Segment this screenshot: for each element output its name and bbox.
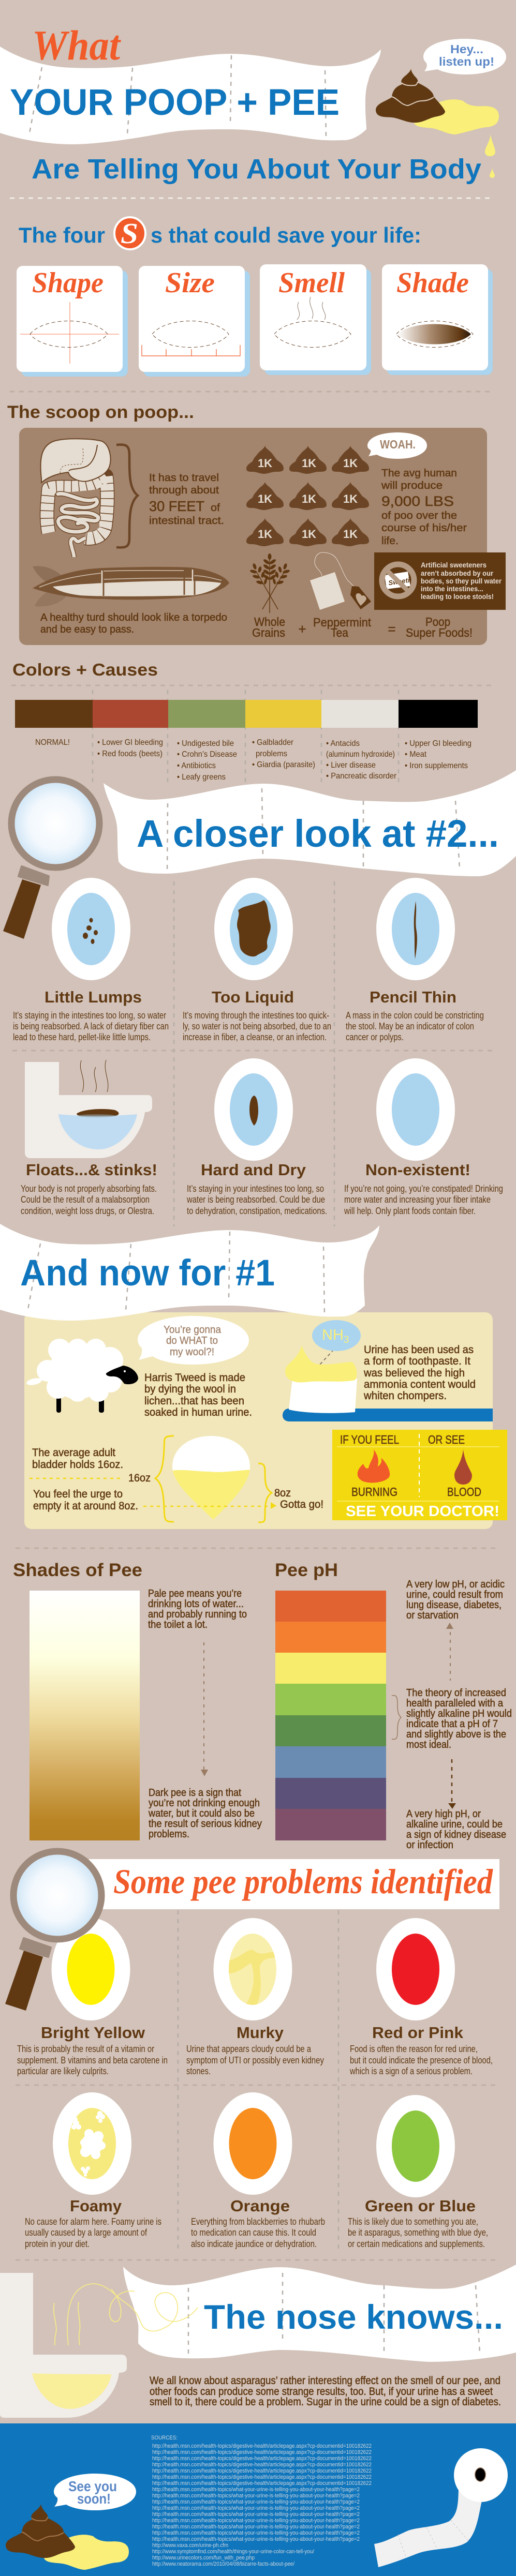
item: non-existent: Non-existent! — [365, 1161, 470, 1179]
item: bright yellow: This is probably the result of a vitamin or — [17, 2044, 154, 2054]
item: too liquid: Too Liquid — [212, 988, 294, 1006]
callout: see your doctor: BLOOD — [447, 1485, 481, 1499]
diagram: bladder: The average adult — [32, 1447, 115, 1459]
icon grid: 1K poops — [246, 446, 369, 546]
text: super foods equation: = — [388, 621, 396, 637]
icon grid: 1K poops: 1K — [302, 492, 316, 505]
callout: see your doctor: BURNING — [351, 1485, 397, 1499]
card: shade: Shade — [396, 267, 469, 299]
speech bubble: woah: WOAH. — [380, 438, 416, 451]
text: color causes: • Crohn’s Disease — [177, 750, 237, 759]
card: size: Size — [165, 267, 215, 299]
icon: blood drop — [454, 1449, 472, 1485]
banner: the nose knows: The nose knows... — [204, 2298, 503, 2336]
item: orange — [191, 2092, 325, 2249]
text: ideal ph: and slightly above is the — [406, 1729, 506, 1740]
text: color causes: • Antacids — [326, 739, 360, 748]
item: orange: Orange — [230, 2197, 290, 2215]
banner: a closer look at #2 — [104, 770, 516, 876]
icon: toilet with yellow water and smell lines — [0, 2273, 198, 2418]
text: toothpaste: whiten chompers. — [363, 1390, 447, 1402]
item: green or blue: or certain medications and supplements. — [348, 2239, 485, 2249]
item: red or pink — [349, 1918, 493, 2076]
text: color causes: • Iron supplements — [405, 761, 468, 770]
item: bright yellow: particular are likely culprits. — [17, 2066, 109, 2076]
icon grid: 1K poops: 1K — [258, 492, 272, 505]
diagram: bladder: empty it at around 8oz. — [33, 1500, 138, 1512]
text: healthy turd: A healthy turd should look like a torpedo — [40, 611, 227, 623]
item: pencil thin — [346, 878, 484, 1042]
text: toothpaste: ammonia content would — [364, 1379, 476, 1390]
text: 9000 lbs: of poo over the — [381, 510, 457, 521]
banner: and now for #1: And now for #1 — [20, 1253, 275, 1294]
item: bright yellow: supplement. B vitamins and beta carotene in — [17, 2055, 168, 2065]
icon: toilet paper roll — [374, 2448, 508, 2567]
item: little lumps: lead to these hard, pellet-like little lumps. — [13, 1032, 151, 1042]
icon grid: 1K poops: 1K — [343, 492, 358, 505]
item: little lumps — [13, 878, 169, 1042]
item: foamy — [25, 2092, 161, 2249]
item: murky: symptom of UTI or possibly even kidney — [186, 2055, 324, 2065]
banner: a closer look at #2: A closer look at #2... — [137, 812, 499, 855]
icon: torpedo — [33, 566, 229, 607]
speech bubble: wool: do WHAT to — [166, 1335, 218, 1346]
diagram: bladder: 16oz — [128, 1472, 151, 1484]
text: high ph: a sign of kidney disease — [406, 1829, 506, 1840]
item: non-existent — [344, 1058, 503, 1216]
text: sources: http://health.msn.com/health-topics/digestive-health/articlepage.aspx?cp-documentid=100182622 — [152, 2443, 372, 2449]
text: super foods equation: Whole — [254, 615, 285, 628]
text: toothpaste: was believed the high — [363, 1367, 465, 1379]
heading: the four S: The four — [19, 223, 105, 247]
speech bubble: see you soon: See you — [68, 2478, 117, 2494]
text: sources: http://health.msn.com/health-topics/what-your-urine-is-telling-you-about-your-health?page=2 — [152, 2487, 360, 2493]
text: dark pee: the result of serious kidney — [149, 1818, 262, 1830]
callout: artificial sweeteners: Artificial sweeteners — [421, 561, 486, 569]
icon: no sweetener sign — [382, 564, 414, 596]
diagram: bladder: Gotta go! — [280, 1499, 323, 1510]
item: floats and stinks: condition, weight loss drugs, or Olestra. — [21, 1206, 154, 1216]
text: high ph — [406, 1808, 506, 1851]
icon grid: 1K poops: 1K — [258, 528, 272, 541]
icon: sheep — [26, 1339, 138, 1413]
text: 9000 lbs — [381, 467, 467, 547]
text: 30 feet: through about — [149, 484, 219, 496]
diagram: bladder — [30, 1433, 323, 1523]
callout: artificial sweeteners: aren’t absorbed by our — [421, 569, 494, 577]
text: sources: http://www.urinecolors.com/fun_with_pee.php — [152, 2555, 255, 2561]
speech bubble: hey listen up — [423, 39, 506, 74]
item: green or blue: be it asparagus, something with blue dye, — [348, 2227, 488, 2238]
callout: artificial sweeteners: into the intestines... — [421, 585, 483, 593]
icon: magnifying glass — [3, 780, 99, 939]
item: orange: Everything from blackberries to rhubarb — [191, 2216, 325, 2227]
heading: the four S: S — [121, 218, 138, 250]
item: bright yellow: Bright Yellow — [41, 2024, 145, 2042]
subtitle: Are Telling You About Your Body — [32, 154, 481, 185]
icon: toothbrush: NH — [322, 1327, 344, 1343]
chart: color swatches — [15, 700, 478, 728]
callout: artificial sweeteners: bodies, so they pull water — [421, 577, 502, 585]
text: sources: http://health.msn.com/health-topics/what-your-urine-is-telling-you-about-your-health?page=2 — [152, 2524, 360, 2530]
text: pale pee: and probably running to — [148, 1609, 247, 1620]
icon: intestines — [40, 439, 110, 557]
text: color causes: (aluminum hydroxide) — [326, 750, 395, 759]
text: color causes: • Antibiotics — [177, 761, 216, 770]
speech bubble: hey listen up: Hey... — [450, 42, 483, 56]
text: sources: http://www.neatorama.com/2010/04/08/bizarre-facts-about-pee/ — [152, 2561, 295, 2567]
text: toothpaste: a form of toothpaste. It — [364, 1355, 470, 1367]
text: super foods equation: Poop — [425, 615, 450, 628]
text: pale pee: the toilet a lot. — [148, 1619, 208, 1630]
text: sources: http://health.msn.com/health-topics/what-your-urine-is-telling-you-about-your-health?page=2 — [152, 2493, 360, 2499]
icon: poop and pee puddle — [376, 69, 499, 134]
speech bubble: wool: You’re gonna — [164, 1324, 222, 1336]
text: ideal ph: health paralleled with a — [406, 1698, 504, 1709]
diagram: bladder: You feel the urge to — [33, 1488, 123, 1500]
item: little lumps: is being reabsorbed. A lack of dietary fiber can — [13, 1021, 169, 1031]
text: dark pee: water, but it could also be — [148, 1808, 255, 1819]
text: 30 feet: of — [211, 502, 220, 514]
brace: ideal ph — [392, 1696, 401, 1739]
text: dark pee: problems. — [149, 1829, 189, 1840]
text: color causes: • Meat — [405, 750, 427, 759]
text: pale pee: Pale pee means you’re — [148, 1588, 242, 1599]
card: smell: Smell — [278, 267, 345, 299]
text: color causes: • Red foods (beets) — [97, 750, 163, 758]
item: hard and dry: water is being reabsorbed. Could be due — [186, 1194, 325, 1205]
chart: pee shade gradient — [30, 1591, 140, 1840]
speech bubble: hey listen up: listen up! — [439, 55, 494, 68]
text: super foods equation: + — [298, 621, 306, 637]
text: 9000 lbs: 9,000 LBS — [381, 493, 454, 509]
text: harris tweed: lichen...that has been — [144, 1395, 244, 1407]
icon: magnifying glass — [5, 1851, 101, 2011]
text: 30 feet: 30 FEET — [149, 498, 204, 514]
item: orange: to medication can cause this. It could — [191, 2227, 316, 2238]
text: color causes: NORMAL! — [35, 738, 70, 747]
text: sources: http://health.msn.com/health-topics/what-your-urine-is-telling-you-about-your-health?page=2 — [152, 2499, 360, 2505]
icon: toothbrush — [283, 1320, 493, 1421]
text: low ph: or starvation — [406, 1610, 459, 1621]
card: shade — [382, 264, 493, 375]
text: sources: http://health.msn.com/health-topics/digestive-health/articlepage.aspx?cp-documentid=100182622 — [152, 2468, 372, 2474]
text: color causes: • Undigested bile — [177, 739, 234, 748]
text: color causes — [35, 738, 471, 782]
item: hard and dry: It’s staying in your intestines too long, so — [187, 1184, 324, 1194]
text: healthy turd: and be easy to pass. — [40, 623, 134, 635]
card: smell — [260, 264, 371, 375]
item: pencil thin: A mass in the colon could be constricting — [346, 1010, 484, 1021]
text: dark pee: you’re not drinking enough — [149, 1798, 260, 1809]
item: pencil thin: Pencil Thin — [370, 988, 456, 1006]
text: sources: http://health.msn.com/health-topics/what-your-urine-is-telling-you-about-your-health?page=2 — [152, 2530, 360, 2536]
text: super foods equation — [252, 615, 473, 639]
text: toothpaste: Urine has been used as — [364, 1344, 474, 1356]
banner: toilet paper title: YOUR POOP + PEE — [10, 82, 340, 123]
icon grid: 1K poops: 1K — [343, 457, 358, 470]
text: color causes: • Liver disease — [326, 761, 376, 770]
text: dark pee: Dark pee is a sign that — [149, 1787, 241, 1799]
text: ideal ph: indicate that a pH of 7 — [406, 1718, 498, 1730]
diagram: bladder: bladder holds 16oz. — [32, 1459, 123, 1471]
text: color causes: • Leafy greens — [177, 773, 226, 782]
item: hard and dry: to dehydration, constipation, medications. — [187, 1206, 327, 1216]
item: foamy: protein in your diet. — [25, 2239, 90, 2249]
item: murky: stones. — [186, 2066, 211, 2076]
text: high ph: A very high pH, or — [406, 1808, 481, 1820]
text: ideal ph: The theory of increased — [406, 1687, 506, 1699]
text: pale pee: drinking lots of water... — [148, 1598, 244, 1610]
text: pale pee — [148, 1588, 247, 1630]
text: harris tweed: Harris Tweed is made — [144, 1372, 245, 1384]
speech bubble: see you soon — [54, 2474, 136, 2510]
item: foamy: usually caused by a large amount of — [25, 2227, 148, 2238]
text: 9000 lbs: course of his/her — [381, 522, 467, 534]
speech bubble: woah — [367, 432, 427, 459]
text: 9000 lbs: will produce — [381, 480, 443, 491]
item: red or pink: which is a sign of a serious problem. — [349, 2066, 473, 2076]
item: green or blue: Green or Blue — [365, 2197, 476, 2215]
card: shape: Shape — [32, 267, 104, 299]
text: sources: http://health.msn.com/health-topics/what-your-urine-is-telling-you-about-your-health?page=2 — [152, 2511, 360, 2518]
text: super foods equation: Grains — [252, 626, 285, 639]
icon: bracket — [116, 445, 138, 547]
arrow: down to high ph — [448, 1759, 456, 1809]
callout: see your doctor — [332, 1430, 507, 1520]
card: shape — [17, 266, 128, 377]
speech bubble: wool — [138, 1316, 249, 1365]
callout: see your doctor: IF YOU FEEL — [340, 1433, 399, 1446]
text: high ph: or infection — [406, 1839, 453, 1851]
item: too liquid: ly, so water is not being absorbed, due to an — [183, 1021, 331, 1031]
icon grid: 1K poops: 1K — [302, 457, 316, 470]
arrow: up to low ph — [446, 1623, 453, 1681]
text: sources: http://health.msn.com/health-topics/digestive-health/articlepage.aspx?cp-documentid=100182622 — [152, 2449, 372, 2455]
text: sources — [151, 2435, 372, 2567]
text: color causes: • Pancreatic disorder — [326, 772, 397, 781]
item: non-existent: will help. Only plant foods contain fiber. — [344, 1206, 476, 1216]
text: sources: http://health.msn.com/health-topics/what-your-urine-is-telling-you-about-your-health?page=2 — [152, 2518, 360, 2524]
text: 30 feet: It has to travel — [149, 472, 219, 484]
heading: the four S — [19, 217, 421, 250]
item: murky: Urine that appears cloudy could be a — [186, 2044, 312, 2054]
text: high ph: alkaline urine, could be — [406, 1819, 503, 1830]
item: red or pink: Food is often the reason for red urine, — [350, 2044, 478, 2054]
text: ideal ph — [406, 1687, 512, 1750]
banner: toilet paper title — [0, 47, 381, 144]
heading: shades of pee: Shades of Pee — [13, 1560, 142, 1580]
item: too liquid: It’s moving through the intestines too quick- — [183, 1010, 329, 1021]
item: bright yellow — [17, 1918, 168, 2076]
text: sources: http://health.msn.com/health-topics/digestive-health/articlepage.aspx?cp-documentid=100182622 — [152, 2455, 372, 2462]
callout: see your doctor: OR SEE — [428, 1433, 465, 1446]
item: foamy: No cause for alarm here. Foamy urine is — [25, 2216, 161, 2227]
speech bubble: see you soon: soon! — [77, 2491, 111, 2507]
item: murky — [186, 1918, 324, 2076]
text: low ph: lung disease, diabetes, — [406, 1599, 502, 1611]
chart: ph scale — [275, 1591, 386, 1840]
text: color causes: • Galbladder — [252, 738, 294, 747]
text: 30 feet — [149, 472, 224, 527]
panel: footer — [0, 2423, 516, 2576]
item: little lumps: Little Lumps — [45, 988, 142, 1006]
text: super foods equation: Peppermint — [313, 616, 372, 629]
text: low ph: A very low pH, or acidic — [406, 1579, 505, 1590]
text: color causes: • Giardia (parasite) — [252, 760, 315, 769]
item: floats and stinks: Your body is not properly absorbing fats. — [21, 1184, 157, 1194]
text: dark pee — [148, 1787, 262, 1840]
text: color causes: • Lower GI bleeding — [97, 738, 163, 747]
diagram: bladder: 8oz — [274, 1487, 291, 1499]
icon grid: 1K poops: 1K — [302, 528, 316, 541]
text: sources: http://health.msn.com/health-topics/digestive-health/articlepage.aspx?cp-documentid=100182622 — [152, 2462, 372, 2468]
text: harris tweed: by dying the wool in — [144, 1383, 236, 1395]
icon: tea bag — [310, 552, 371, 610]
icon: toothbrush: 3 — [344, 1335, 349, 1345]
text: 9000 lbs: life. — [381, 535, 399, 547]
text: sweet smell — [150, 2375, 501, 2408]
text: sources: http://health.msn.com/health-topics/what-your-urine-is-telling-you-about-your-health?page=2 — [152, 2536, 360, 2542]
text: super foods equation: Tea — [331, 626, 348, 639]
item: green or blue: This is likely due to something you ate, — [348, 2216, 478, 2227]
icon: pee drips — [485, 134, 495, 178]
text: color causes: problems — [256, 750, 287, 758]
text: color causes: • Upper GI bleeding — [405, 739, 471, 748]
item: too liquid: increase in fiber, a cleanse, or an infection. — [183, 1032, 327, 1042]
text: sources: http://www.vaxa.com/urine-ph.cfm — [152, 2542, 228, 2549]
heading: colors and causes: Colors + Causes — [12, 660, 158, 679]
callout: artificial sweeteners — [374, 552, 506, 610]
item: foamy: Foamy — [70, 2197, 122, 2215]
item: floats and stinks — [21, 1060, 157, 1216]
text: harris tweed: soaked in human urine. — [144, 1406, 252, 1418]
item: pencil thin: the stool. May be an indicator of colon — [346, 1021, 474, 1031]
item: hard and dry: Hard and Dry — [201, 1161, 306, 1179]
speech bubble: wool: my wool?! — [170, 1346, 214, 1358]
arrow: pale to dark — [201, 1642, 208, 1776]
banner: the nose knows — [123, 2265, 516, 2362]
card: size — [139, 266, 250, 377]
heading: the scoop on poop: The scoop on poop... — [7, 402, 194, 422]
heading: the four S: s that could save your life: — [151, 223, 421, 247]
item: too liquid — [183, 878, 331, 1042]
icon: toilet with floating stool — [25, 1060, 152, 1158]
heading word: What: What — [32, 22, 121, 69]
item: pencil thin: cancer or polyps. — [346, 1032, 404, 1042]
icon grid: 1K poops: 1K — [258, 457, 272, 470]
heading: pee ph: Pee pH — [275, 1560, 338, 1580]
callout: see your doctor: SEE YOUR DOCTOR! — [346, 1503, 499, 1520]
item: murky: Murky — [237, 2024, 284, 2042]
text: healthy turd — [40, 611, 227, 635]
panel: pee facts — [24, 1312, 507, 1529]
item: floats and stinks: Floats...& stinks! — [26, 1161, 157, 1179]
text: low ph — [406, 1579, 505, 1621]
item: red or pink: Red or Pink — [372, 2024, 464, 2042]
item: floats and stinks: Could be the result of a malabsorption — [21, 1194, 150, 1205]
text: sources: http://health.msn.com/health-topics/digestive-health/articlepage.aspx?cp-documentid=100182622 — [152, 2480, 372, 2487]
callout: artificial sweeteners: leading to loose stools! — [421, 592, 494, 601]
text: 30 feet: intestinal tract. — [149, 515, 224, 527]
text: sources: SOURCES: — [151, 2435, 178, 2441]
text: ideal ph: most ideal. — [406, 1739, 451, 1750]
icon: wheat — [249, 553, 290, 613]
text: super foods equation: Super Foods! — [406, 626, 473, 639]
text: 9000 lbs: The avg human — [381, 467, 457, 479]
banner: and now for #1 — [0, 1223, 379, 1321]
item: green or blue — [348, 2095, 488, 2249]
text: sources: http://health.msn.com/health-topics/what-your-urine-is-telling-you-about-your-health?page=2 — [152, 2505, 360, 2511]
text: low ph: urine, could result from — [406, 1589, 503, 1600]
item: little lumps: It’s staying in the intestines too long, so water — [13, 1010, 166, 1021]
icon: flame — [358, 1449, 390, 1482]
icon: no sweetener sign: Sweetie — [388, 576, 414, 587]
panel: scoop on poop — [19, 428, 506, 645]
icon grid: 1K poops: 1K — [343, 528, 358, 541]
icon: poop and pee puddle — [6, 2504, 129, 2570]
text: sources: http://health.msn.com/health-topics/digestive-health/articlepage.aspx?cp-documentid=100182622 — [152, 2474, 372, 2480]
text: harris tweed — [144, 1372, 252, 1418]
item: orange: also indicate jaundice or dehydration. — [191, 2239, 317, 2249]
text: toothpaste — [363, 1344, 476, 1402]
text: sources: http://www.symptomfind.com/health/things-your-urine-color-can-tell-you/ — [152, 2549, 315, 2555]
item: hard and dry — [186, 1058, 327, 1216]
